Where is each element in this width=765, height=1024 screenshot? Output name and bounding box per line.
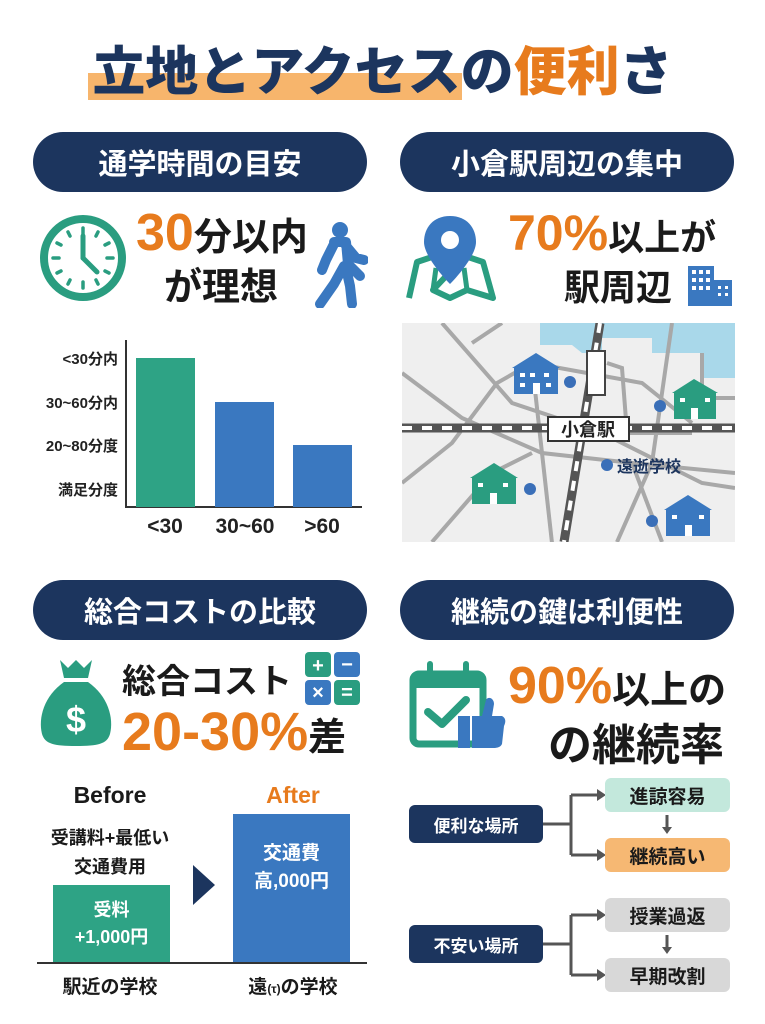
- icon: calendar with thumb: [410, 661, 506, 748]
- bar chart: >60: [304, 515, 340, 538]
- icon: map pin: [406, 216, 496, 301]
- icon: money bag: [40, 660, 112, 746]
- icon: calculator: =: [341, 682, 353, 704]
- title: 立地とアクセスの便利さ: [92, 43, 673, 102]
- node: 不安い場所: [409, 925, 543, 963]
- text: 30分以内が理想: 30分以内: [136, 204, 308, 262]
- node: 進諒容易: [605, 778, 730, 812]
- text: 30分以内が理想: [136, 204, 308, 309]
- text: 総合コスト 20-30%差: 20-30%差: [122, 702, 346, 762]
- icon: calculator: +: [312, 655, 324, 677]
- label: 遠の学校: 遠(τ)の学校: [248, 977, 338, 998]
- icon: calculator: ×: [312, 682, 324, 704]
- icon: walker: [315, 222, 368, 308]
- map: 遠逝学校: [617, 457, 681, 476]
- pill: 継続の鍵は利便性: 継続の鍵は利便性: [451, 597, 683, 629]
- node: 授業過返: 授業過返: [629, 906, 706, 928]
- icon: clock: [40, 215, 126, 301]
- icon: calculator: −: [341, 654, 353, 676]
- node: 便利な場所: [409, 805, 543, 843]
- text: 総合コスト 20-30%差: 総合コスト: [122, 663, 292, 701]
- pill: 総合コストの比較: [33, 580, 367, 640]
- pill: 通学時間の目安: [33, 132, 367, 192]
- pill: 継続の鍵は利便性: [400, 580, 734, 640]
- station label: [548, 417, 629, 441]
- pill: 小倉駅周辺の集中: 小倉駅周辺の集中: [451, 149, 683, 181]
- pill: 通学時間の目安: 通学時間の目安: [98, 149, 302, 181]
- bar chart: <30分内: [63, 351, 118, 368]
- node: 進諒容易: 進諒容易: [629, 786, 706, 808]
- before description: 交通費用: [74, 857, 146, 877]
- text: 70%以上が駅周辺: 駅周辺: [564, 267, 672, 308]
- node: 早期改割: [605, 958, 730, 992]
- arrow: [193, 865, 215, 905]
- icon: building: [688, 266, 732, 306]
- icon: calculator: [305, 652, 360, 705]
- text: 総合コスト 20-30%差: [122, 663, 346, 762]
- node: 継続高い: [605, 838, 730, 872]
- text: 30分以内が理想: が理想: [164, 267, 278, 309]
- label: Before: Before: [74, 782, 146, 808]
- bar chart: [46, 340, 362, 538]
- node: 継続高い: 継続高い: [629, 846, 706, 868]
- label: 駅近の学校: 駅近の学校: [62, 977, 158, 998]
- after bar: 高,000円: [254, 871, 329, 892]
- text: 90%以上のの継続率: の継続率: [548, 721, 724, 770]
- icon: money bag: $: [66, 699, 86, 740]
- station label: 小倉駅: [561, 419, 615, 440]
- bar chart: 満足分度: [58, 481, 118, 499]
- text: 70%以上が駅周辺: 70%以上が: [508, 205, 716, 261]
- before bar: [53, 885, 170, 963]
- before description: 受講料+最低い: [51, 828, 169, 848]
- node: 授業過返: [605, 898, 730, 932]
- before description: [51, 828, 169, 877]
- pill: 小倉駅周辺の集中: [400, 132, 734, 192]
- text: 90%以上のの継続率: 90%以上の: [508, 657, 726, 715]
- before bar: +1,000円: [75, 927, 148, 947]
- node: 早期改割: 早期改割: [629, 966, 706, 988]
- bar chart: 30~60分内: [46, 395, 118, 412]
- bar chart: 30~60: [216, 515, 274, 538]
- label: After: After: [266, 782, 320, 808]
- pill: 総合コストの比較: 総合コストの比較: [84, 597, 316, 629]
- text: 70%以上が駅周辺: [508, 205, 716, 308]
- node: 不安い場所: 不安い場所: [434, 936, 518, 956]
- before bar: 受料: [94, 900, 130, 920]
- node: 便利な場所: 便利な場所: [434, 816, 518, 836]
- before/after comparison: [37, 782, 367, 998]
- after bar: [233, 814, 350, 963]
- bar chart: <30: [147, 515, 183, 538]
- map: [402, 323, 735, 542]
- text: 90%以上のの継続率: [508, 657, 726, 770]
- bar chart: 20~80分度: [46, 437, 118, 455]
- flow diagram: [543, 789, 672, 981]
- after bar: 交通費: [263, 843, 320, 864]
